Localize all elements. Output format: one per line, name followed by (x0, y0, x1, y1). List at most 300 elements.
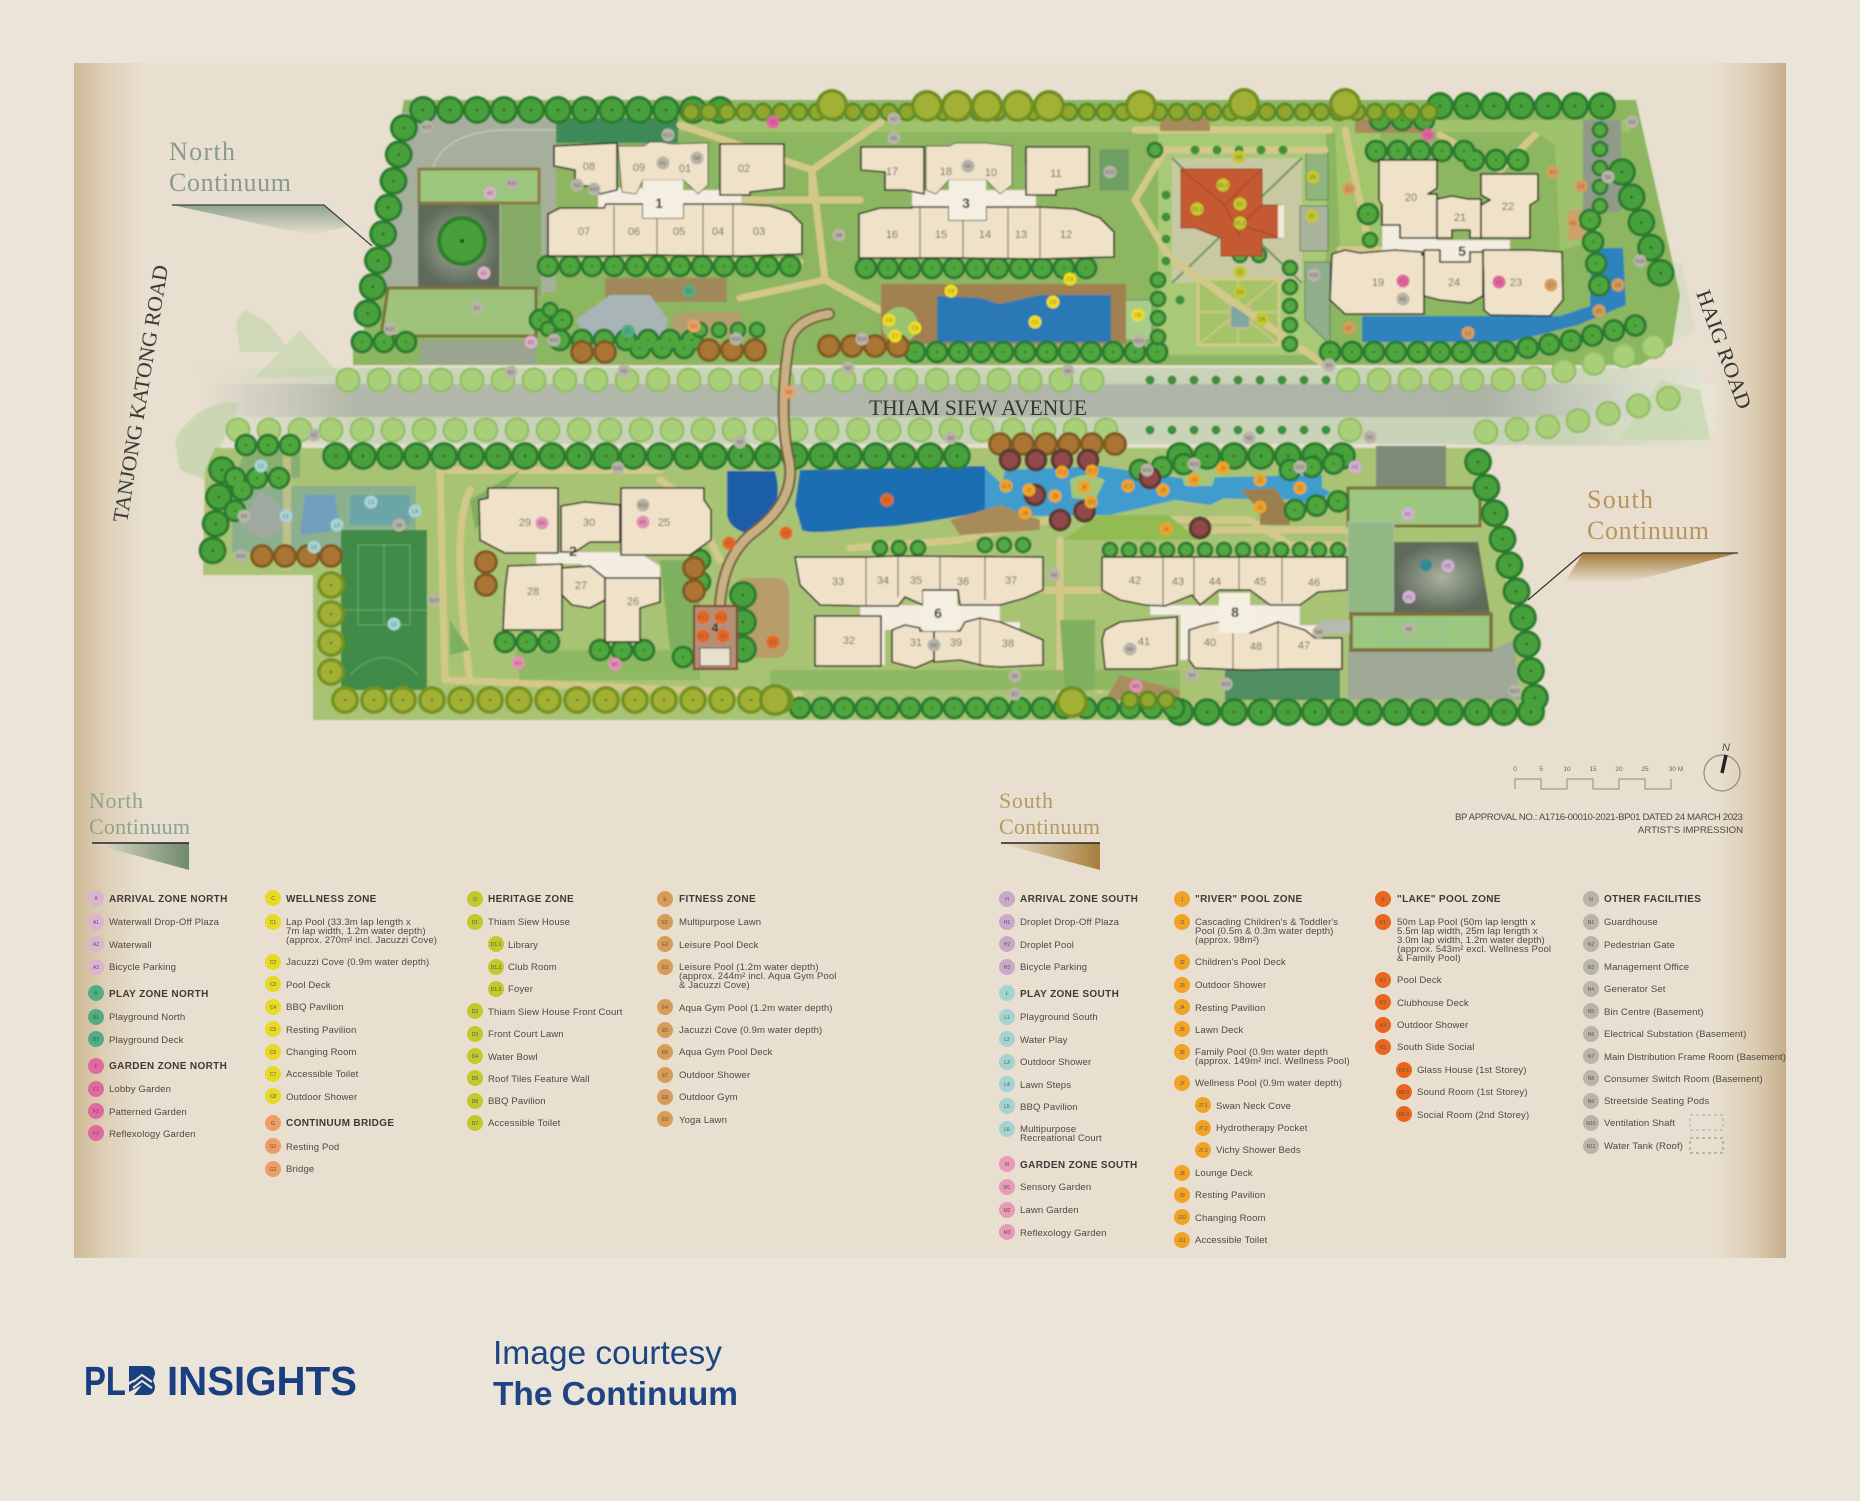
building cluster 8: 48 (1250, 641, 1262, 653)
legend: garden zone north: Patterned Garden (109, 1107, 187, 1118)
facility markers: wellness, heritage and fitness: E7 (1548, 283, 1554, 289)
facility markers: grey other facilities: N5 (1012, 674, 1018, 680)
building cluster 1: 09 (633, 162, 645, 174)
facility markers: grey other facilities: N10 (236, 554, 246, 560)
legend column 6: river pool zone: J3 (1179, 983, 1185, 989)
legend column 7: lake pool zone: Pool Deck (1397, 975, 1442, 986)
facility markers: lake and river pool zones: J1 (1297, 486, 1303, 492)
legend column 6: river pool zone: Cascading Children's & Toddler's (1195, 917, 1338, 928)
legend: continuum bridge: Bridge (286, 1164, 314, 1175)
facility markers: grey other facilities: N8 (836, 233, 842, 239)
legend: wellness zone: C3 (270, 982, 276, 988)
legend: wellness zone: Accessible Toilet (286, 1069, 359, 1080)
facility markers: wellness, heritage and fitness: D5 (1310, 175, 1316, 181)
legend column 6: river pool zone: Outdoor Shower (1195, 980, 1267, 991)
legend column 7: lake pool zone: Glass House (1st Storey) (1417, 1065, 1527, 1076)
facility markers: grey other facilities: N10 (638, 503, 648, 509)
heading: legend North Continuum (89, 788, 190, 870)
legend column 3: heritage zone: Accessible Toilet (488, 1118, 561, 1129)
legend column 8: other facilities: N2 (1588, 942, 1594, 948)
legend column 8: other facilities: OTHER FACILITIES (1604, 894, 1701, 905)
building cluster 5: 24 (1448, 277, 1460, 289)
legend: continuum bridge: G1 (270, 1144, 277, 1150)
legend column 6: river pool zone: J7 (1179, 1081, 1185, 1087)
building cluster 3: 18 (940, 166, 952, 178)
legend column 8: other facilities: N8 (1588, 1076, 1594, 1082)
building cluster 3: 14 (979, 229, 991, 241)
facility markers: grey other facilities: N2 (1326, 363, 1332, 369)
panel: site plan brochure spread (74, 63, 1786, 1258)
legend column 3: heritage zone: Library (508, 940, 538, 951)
map road label: Tanjong Katong Road: TANJONG KATONG ROAD (108, 263, 173, 524)
callout: North Continuum on map (169, 137, 372, 246)
facility markers: lake and river pool zones: J7.2 (1087, 469, 1097, 475)
legend: play zone north: B1 (93, 1015, 99, 1021)
facility markers: grey other facilities: N5 (1400, 297, 1406, 303)
legend: wellness zone: BBQ Pavilion (286, 1002, 344, 1013)
callout: South Continuum on map: South (1587, 485, 1653, 514)
facility markers: wellness, heritage and fitness: D2 (1237, 270, 1243, 276)
legend: arrival zone south: H (1005, 897, 1009, 903)
scale bar: 30 M (1669, 766, 1683, 773)
facility markers: grey other facilities: N4 (1189, 673, 1195, 679)
legend: garden zone south: Sensory Garden (1020, 1182, 1091, 1193)
scale bar: 25 (1641, 766, 1649, 773)
facility markers: wellness, heritage and fitness: D4 (1259, 317, 1265, 323)
building cluster 3: 3 (962, 195, 970, 211)
heading: legend South Continuum (999, 788, 1100, 870)
legend column 6: river pool zone: "RIVER" POOL ZONE (1195, 894, 1302, 905)
facility markers: south play, garden and arrival: L5 (311, 545, 317, 551)
facility markers: wellness, heritage and fitness: D6 (1236, 155, 1242, 161)
legend column 6: river pool zone: J7.2 (1198, 1126, 1208, 1132)
legend column 6: river pool zone: J2 (1179, 960, 1185, 966)
building cluster 2: 26 (627, 596, 639, 608)
legend: garden zone south: Reflexology Garden (1020, 1228, 1107, 1239)
legend: play zone south: BBQ Pavilion (1020, 1102, 1078, 1113)
legend column 3: heritage zone: D4 (472, 1054, 478, 1060)
legend column 3: heritage zone: Water Bowl (488, 1052, 538, 1063)
legend: wellness zone: WELLNESS ZONE (286, 894, 377, 905)
legend: wellness zone: C6 (270, 1050, 276, 1056)
legend: garden zone north: F1 (93, 1087, 99, 1093)
tennis court (341, 530, 427, 690)
facility markers: south play, garden and arrival: M2 (515, 661, 522, 667)
facility markers: south play, garden and arrival: H1 (1406, 595, 1412, 601)
facility markers: grey other facilities: N10 (1105, 170, 1115, 176)
legend column 7: lake pool zone: K5 (1380, 1045, 1386, 1051)
legend column 8: other facilities: Main Distribution Frame Room (Basement) (1604, 1052, 1786, 1063)
facility markers: grey other facilities: N10 (1510, 689, 1520, 695)
facility markers: wellness, heritage and fitness: D7 (1309, 214, 1315, 220)
building cluster 6: 32 (843, 635, 855, 647)
south ground and lawns (203, 448, 1545, 720)
facility markers: south play, garden and arrival: M3 (1133, 684, 1140, 690)
legend column 4: fitness zone: FITNESS ZONE (679, 894, 756, 905)
building cluster 8: 8 (1231, 604, 1239, 620)
facility markers: south play, garden and arrival: L3 (368, 500, 374, 506)
facility markers: grey other facilities: N6 (965, 164, 971, 170)
facility markers: wellness, heritage and fitness: D1 (1237, 202, 1243, 208)
legend column 6: river pool zone: J5 (1179, 1027, 1185, 1033)
heading: legend South Continuum: South (999, 788, 1053, 813)
road: Thiam Siew Avenue (175, 260, 1715, 480)
legend column 8: other facilities: N5 (1588, 1009, 1594, 1015)
legend: arrival zone north: A1 (93, 920, 99, 926)
clubhouse 4 south (694, 606, 737, 669)
legend: play zone south: Recreational Court (1020, 1133, 1102, 1144)
building cluster 8: 43 (1172, 576, 1184, 588)
facility markers: grey other facilities: N10 (507, 181, 517, 187)
facility markers: grey other facilities: N10 (663, 133, 673, 139)
facility markers: lake and river pool zones: J4 (1022, 511, 1028, 517)
facility markers: grey other facilities: N3 (1629, 120, 1635, 126)
map road label: Haig Road: HAIG ROAD (1691, 287, 1757, 412)
building cluster 8: 45 (1254, 576, 1266, 588)
legend column 7: lake pool zone: K2 (1380, 978, 1386, 984)
building cluster 3: 11 (1050, 168, 1062, 180)
legend column 3: heritage zone: Roof Tiles Feature Wall (488, 1074, 590, 1085)
facility markers: grey other facilities: N8 (396, 523, 402, 529)
legend: play zone north: Playground North (109, 1012, 185, 1023)
legend column 4: fitness zone: & Jacuzzi Cove) (679, 980, 750, 991)
legend: play zone south: L5 (1004, 1104, 1010, 1110)
legend: wellness zone (265, 890, 437, 1104)
legend: garden zone north: Lobby Garden (109, 1084, 171, 1095)
legend: wellness zone: C8 (270, 1094, 276, 1100)
legend: play zone south (999, 985, 1119, 1144)
legend column 3: heritage zone: D7 (472, 1121, 478, 1127)
facility markers: grey other facilities: N10 (385, 327, 395, 333)
building cluster 6: 37 (1005, 575, 1017, 587)
lake and river pools (727, 466, 1330, 535)
arrival zone north plaza (381, 112, 556, 364)
legend: wellness zone: C4 (270, 1005, 276, 1011)
building cluster 2: 2 (569, 543, 577, 559)
facility markers: grey other facilities: N10 (731, 337, 741, 343)
facility markers: grey other facilities: N10 (1221, 682, 1231, 688)
clubhouse red roof (1181, 169, 1284, 256)
legend: wellness zone: C7 (270, 1072, 276, 1078)
legend column 4: fitness zone: E4 (662, 1005, 668, 1011)
legend column 8: other facilities: N10 (1586, 1121, 1596, 1127)
legend: arrival zone north: ARRIVAL ZONE NORTH (109, 894, 228, 905)
legend: continuum bridge: G2 (270, 1167, 277, 1173)
legend column 6: river pool zone: J1 (1179, 920, 1185, 926)
building cluster 5: 23 (1510, 277, 1522, 289)
legend: arrival zone south: H2 (1004, 942, 1010, 948)
facility markers: lake and river pool zones: K3 (720, 634, 726, 640)
facility markers: grey other facilities: N10 (1309, 273, 1319, 279)
legend column 4: fitness zone: E9 (662, 1117, 668, 1123)
legend column 7: lake pool zone: K5.3 (1399, 1112, 1409, 1118)
scale bar: 0 (1513, 766, 1517, 773)
callout: North Continuum on map: Continuum (169, 168, 291, 197)
legend column 7: lake pool zone: Sound Room (1st Storey) (1417, 1087, 1528, 1098)
legend column 8: other facilities: N6 (1588, 1032, 1594, 1038)
legend: play zone south: Outdoor Shower (1020, 1057, 1092, 1068)
facility markers: wellness, heritage and fitness: E6 (1570, 221, 1576, 227)
credit: image courtesy (493, 1334, 738, 1412)
legend column 3: heritage zone: Foyer (508, 984, 534, 995)
building cluster 5: 5 (1458, 243, 1466, 259)
building cluster 1: 05 (673, 226, 685, 238)
building cluster 6: 35 (910, 575, 922, 587)
facility markers: north arrival, play and garden: B2 (686, 289, 692, 295)
legend: wellness zone: C (271, 896, 275, 902)
facility markers: lake and river pool zones: J5 (1163, 527, 1169, 533)
scale bar (1513, 766, 1683, 789)
legend: play zone south: L4 (1004, 1082, 1010, 1088)
legend column 7: lake pool zone: (approx. 543m² excl. Wellness Pool (1397, 944, 1551, 955)
facility markers: grey other facilities: N10 (613, 466, 623, 472)
legend: arrival zone north: A (94, 896, 98, 902)
legend column 6: river pool zone: Pool (0.5m & 0.3m water depth) (1195, 926, 1333, 937)
legend: garden zone south: M1 (1004, 1185, 1011, 1191)
legend: garden zone north: F (94, 1064, 98, 1070)
legend column 8: other facilities: Consumer Switch Room (Basement) (1604, 1074, 1763, 1085)
legend column 4: fitness zone: (approx. 244m² incl. Aqua Gym Pool (679, 971, 837, 982)
building cluster 5: 19 (1372, 277, 1384, 289)
logo: PLB Insights: INSIGHTS (167, 1358, 357, 1404)
legend column 8: other facilities: N9 (1588, 1099, 1594, 1105)
legend column 8: other facilities (1583, 891, 1786, 1154)
legend column 7: lake pool zone: Outdoor Shower (1397, 1020, 1469, 1031)
legend: garden zone north: F3 (93, 1131, 99, 1137)
legend: wellness zone: C2 (270, 960, 276, 966)
scale bar: 10 (1563, 766, 1571, 773)
legend column 7: lake pool zone: K (1381, 897, 1385, 903)
legend column 6: river pool zone: (approx. 149m² incl. Wellness Pool) (1195, 1056, 1350, 1067)
legend column 3: heritage zone: Front Court Lawn (488, 1029, 564, 1040)
legend: garden zone north: Reflexology Garden (109, 1129, 196, 1140)
building cluster 2: 28 (527, 586, 539, 598)
map road label: Thiam Siew Avenue: THIAM SIEW AVENUE (869, 395, 1087, 420)
legend column 8: other facilities: Guardhouse (1604, 917, 1658, 928)
legend column 7: lake pool zone: 5.5m lap width, 25m lap length x (1397, 926, 1538, 937)
legend column 8: other facilities: N (1589, 897, 1593, 903)
legend: arrival zone south: H1 (1004, 920, 1010, 926)
facility markers: lake and river pool zones: J5 (1220, 466, 1226, 472)
legend column 4: fitness zone: Outdoor Shower (679, 1070, 751, 1081)
logo: PLB Insights: PL (84, 1358, 126, 1404)
legend column 4: fitness zone: Jacuzzi Cove (0.9m water depth) (679, 1025, 822, 1036)
legend column 3: heritage zone: D (473, 897, 477, 903)
legend: garden zone north (88, 1058, 227, 1141)
building cluster 3 (859, 143, 1114, 259)
legend column 4: fitness zone: E5 (662, 1028, 668, 1034)
legend: arrival zone south: ARRIVAL ZONE SOUTH (1020, 894, 1138, 905)
facility markers: south play, garden and arrival: M1 (539, 521, 546, 527)
logo: PLB Insights (84, 1358, 357, 1404)
building cluster 8: 47 (1298, 640, 1310, 652)
facility markers: north arrival, play and garden (478, 116, 1506, 398)
facility markers: lake and river pool zones: J10 (1087, 500, 1095, 506)
building cluster 2: 29 (519, 517, 531, 529)
legend column 6: river pool zone: Wellness Pool (0.9m water depth) (1195, 1078, 1342, 1089)
legend column 3: heritage zone: D6 (472, 1099, 478, 1105)
legend column 3: heritage zone: D1.2 (491, 965, 501, 971)
legend: arrival zone north: A3 (93, 965, 99, 971)
facility markers: grey other facilities: N9 (948, 436, 954, 442)
legend column 6: river pool zone: (approx. 98m²) (1195, 935, 1259, 946)
facility markers: south play, garden and arrival: M1 (640, 520, 647, 526)
legend: garden zone south (999, 1156, 1138, 1240)
building cluster 1: 1 (655, 195, 663, 211)
legend column 4: fitness zone: E6 (662, 1050, 668, 1056)
facility markers: wellness, heritage and fitness: E4 (1550, 170, 1556, 176)
legend: wellness zone: 7m lap width, 1.2m water depth) (286, 926, 426, 937)
facility markers: wellness, heritage and fitness: E8 (1615, 283, 1621, 289)
building cluster 6: 31 (910, 637, 922, 649)
facility markers: grey other facilities: N10 (422, 125, 432, 131)
legend column 7: lake pool zone: K5.2 (1399, 1090, 1409, 1096)
callout: South Continuum on map: Continuum (1587, 516, 1709, 545)
facility markers: lake and river pool zones: K2 (884, 498, 890, 504)
legend column 6: river pool zone: J7.3 (1198, 1148, 1208, 1154)
facility markers: grey other facilities: N10 (549, 338, 559, 344)
facility markers: wellness, heritage and fitness: D1.2 (1218, 183, 1228, 189)
heading: legend North Continuum: Continuum (89, 814, 190, 839)
legend: garden zone south: GARDEN ZONE SOUTH (1020, 1160, 1138, 1171)
legend: arrival zone south: H3 (1004, 965, 1010, 971)
legend: play zone north: B (94, 991, 98, 997)
building cluster 8: 41 (1138, 636, 1150, 648)
facility markers: north arrival, play and garden: G2 (786, 390, 793, 396)
legend column 7: lake pool zone (1375, 891, 1551, 1122)
facility markers: lake and river pool zones: K5.2 (716, 615, 726, 621)
facility markers: grey other facilities: N10 (1142, 468, 1152, 474)
facility markers: grey other facilities: N2 (1367, 435, 1373, 441)
legend: garden zone south: Lawn Garden (1020, 1205, 1079, 1216)
building cluster 3: 12 (1060, 229, 1072, 241)
building cluster 2: 25 (658, 517, 670, 529)
facility markers: wellness, heritage and fitness: C1 (1032, 320, 1038, 326)
approval note: BP APPROVAL NO.: A1716-00010-2021-BP01 DATED 24 MARCH 2023 (1455, 812, 1743, 823)
callout: North Continuum on map: North (169, 137, 235, 166)
scale bar: 15 (1589, 766, 1597, 773)
legend column 4: fitness zone: Yoga Lawn (679, 1115, 727, 1126)
facility markers: grey other facilities: N6 (931, 643, 937, 649)
legend column 4: fitness zone: Aqua Gym Pool Deck (679, 1047, 773, 1058)
legend: wellness zone: C1 (270, 920, 276, 926)
Continuum Bridge (720, 314, 829, 604)
facility markers: lake and river pool zones: J7.1 (1123, 484, 1133, 490)
facility markers: wellness, heritage and fitness: E2 (1465, 331, 1471, 337)
building cluster 6: 39 (950, 637, 962, 649)
legend column 3: heritage zone: D1.1 (491, 942, 501, 948)
scale bar: 20 (1615, 766, 1623, 773)
facility markers: grey other facilities: N2 (311, 433, 317, 439)
facility markers: north arrival, play and garden: B1 (625, 329, 631, 335)
legend column 6: river pool zone: Swan Neck Cove (1216, 1101, 1291, 1112)
legend column 4: fitness zone: E1 (662, 920, 668, 926)
legend: arrival zone north: Bicycle Parking (109, 962, 176, 973)
approval note: ARTIST'S IMPRESSION (1638, 825, 1743, 836)
legend: play zone north: PLAY ZONE NORTH (109, 989, 209, 1000)
facility markers: grey other facilities: N9 (737, 440, 743, 446)
icon: PLB chevron mark (129, 1366, 155, 1395)
legend column 3: heritage zone: Club Room (508, 962, 557, 973)
legend: wellness zone: C5 (270, 1027, 276, 1033)
legend column 8: other facilities: N3 (1588, 965, 1594, 971)
legend: arrival zone south: Droplet Pool (1020, 940, 1074, 951)
facility markers: grey other facilities: N3 (574, 183, 580, 189)
legend: wellness zone: Resting Pavilion (286, 1025, 356, 1036)
legend column 1 (88, 890, 228, 1141)
facility markers: lake and river pool zones: J3 (1257, 505, 1263, 511)
facility markers: south play, garden and arrival: L3 (334, 523, 340, 529)
site plan map (175, 100, 1715, 720)
facility markers: grey other facilities: N9 (1065, 369, 1071, 375)
legend: play zone south: Lawn Steps (1020, 1080, 1071, 1091)
building cluster 8: 44 (1209, 576, 1221, 588)
facility markers: lake and river pool zones: K5.1 (698, 615, 708, 621)
legend column 3: heritage zone: D2 (472, 1009, 478, 1015)
legend: play zone south: L1 (1004, 1015, 1010, 1021)
legend: arrival zone north (88, 890, 228, 975)
facility markers: grey other facilities: N8 (1316, 630, 1322, 636)
facility markers: grey other facilities: N10 (1134, 339, 1144, 345)
legend column 7: lake pool zone: K1 (1380, 920, 1386, 926)
legend: arrival zone north: A2 (93, 942, 99, 948)
legend: play zone south: L2 (1004, 1037, 1010, 1043)
building cluster 6: 38 (1002, 638, 1014, 650)
legend: arrival zone south: Droplet Drop-Off Plaza (1020, 917, 1120, 928)
facility markers: north arrival, play and garden: F1 (1496, 280, 1502, 286)
facility markers: grey other facilities: N7 (1012, 692, 1018, 698)
facility markers: grey other facilities: N10 (429, 598, 439, 604)
facility markers: lake and river pool zones: J1.3 (1001, 484, 1011, 490)
legend: play zone south: PLAY ZONE SOUTH (1020, 989, 1119, 1000)
facility markers: lake and river pool zones: K3 (770, 640, 776, 646)
legend column 7: lake pool zone: K3 (1380, 1000, 1386, 1006)
legend column 8: other facilities: Generator Set (1604, 984, 1666, 995)
facility markers: wellness, heritage and fitness: C4 (886, 318, 892, 324)
legend: continuum bridge: Resting Pod (286, 1142, 339, 1153)
legend: play zone north (88, 985, 209, 1047)
facility markers: wellness, heritage and fitness: E1 (1346, 187, 1352, 193)
facility markers: wellness, heritage and fitness: E7 (1346, 326, 1352, 332)
legend column 3: heritage zone: Thiam Siew House Front Court (488, 1007, 623, 1018)
legend column 8: other facilities: N7 (1588, 1054, 1594, 1060)
facility markers: wellness, heritage and fitness: E3 (1578, 184, 1584, 190)
legend column 6: river pool zone: Family Pool (0.9m water depth (1195, 1047, 1328, 1058)
building cluster 5 (1330, 160, 1563, 316)
facility markers: wellness, heritage and fitness: D3 (1237, 290, 1243, 296)
legend column 4: fitness zone: E (663, 897, 667, 903)
legend: continuum bridge (265, 1115, 394, 1177)
building cluster 6 (795, 556, 1043, 668)
facility markers: lake and river pool zones: J6 (1081, 485, 1087, 491)
legend: play zone south: L3 (1004, 1060, 1010, 1066)
facility markers: wellness, heritage and fitness: C3 (912, 326, 918, 332)
facility markers: grey other facilities: N10 (1189, 462, 1199, 468)
legend column 4: fitness zone: Multipurpose Lawn (679, 917, 761, 928)
legend column 4: fitness zone: E7 (662, 1073, 668, 1079)
facility markers: lake and river pool zones: J7 (1026, 488, 1032, 494)
building cluster 6: 34 (877, 575, 889, 587)
legend column 8: other facilities: Streetside Seating Pods (1604, 1096, 1709, 1107)
north pools and decks (576, 248, 1626, 345)
legend: play zone north: B2 (93, 1037, 99, 1043)
legend: garden zone north: GARDEN ZONE NORTH (109, 1061, 227, 1072)
legend column 7: lake pool zone: K5.1 (1399, 1068, 1409, 1074)
building cluster 1: 04 (712, 226, 724, 238)
legend column 2 (265, 890, 437, 1177)
legend column 7: lake pool zone: 3.0m lap width, 1.2m water depth) (1397, 935, 1545, 946)
legend column 6: river pool zone: Accessible Toilet (1195, 1235, 1268, 1246)
